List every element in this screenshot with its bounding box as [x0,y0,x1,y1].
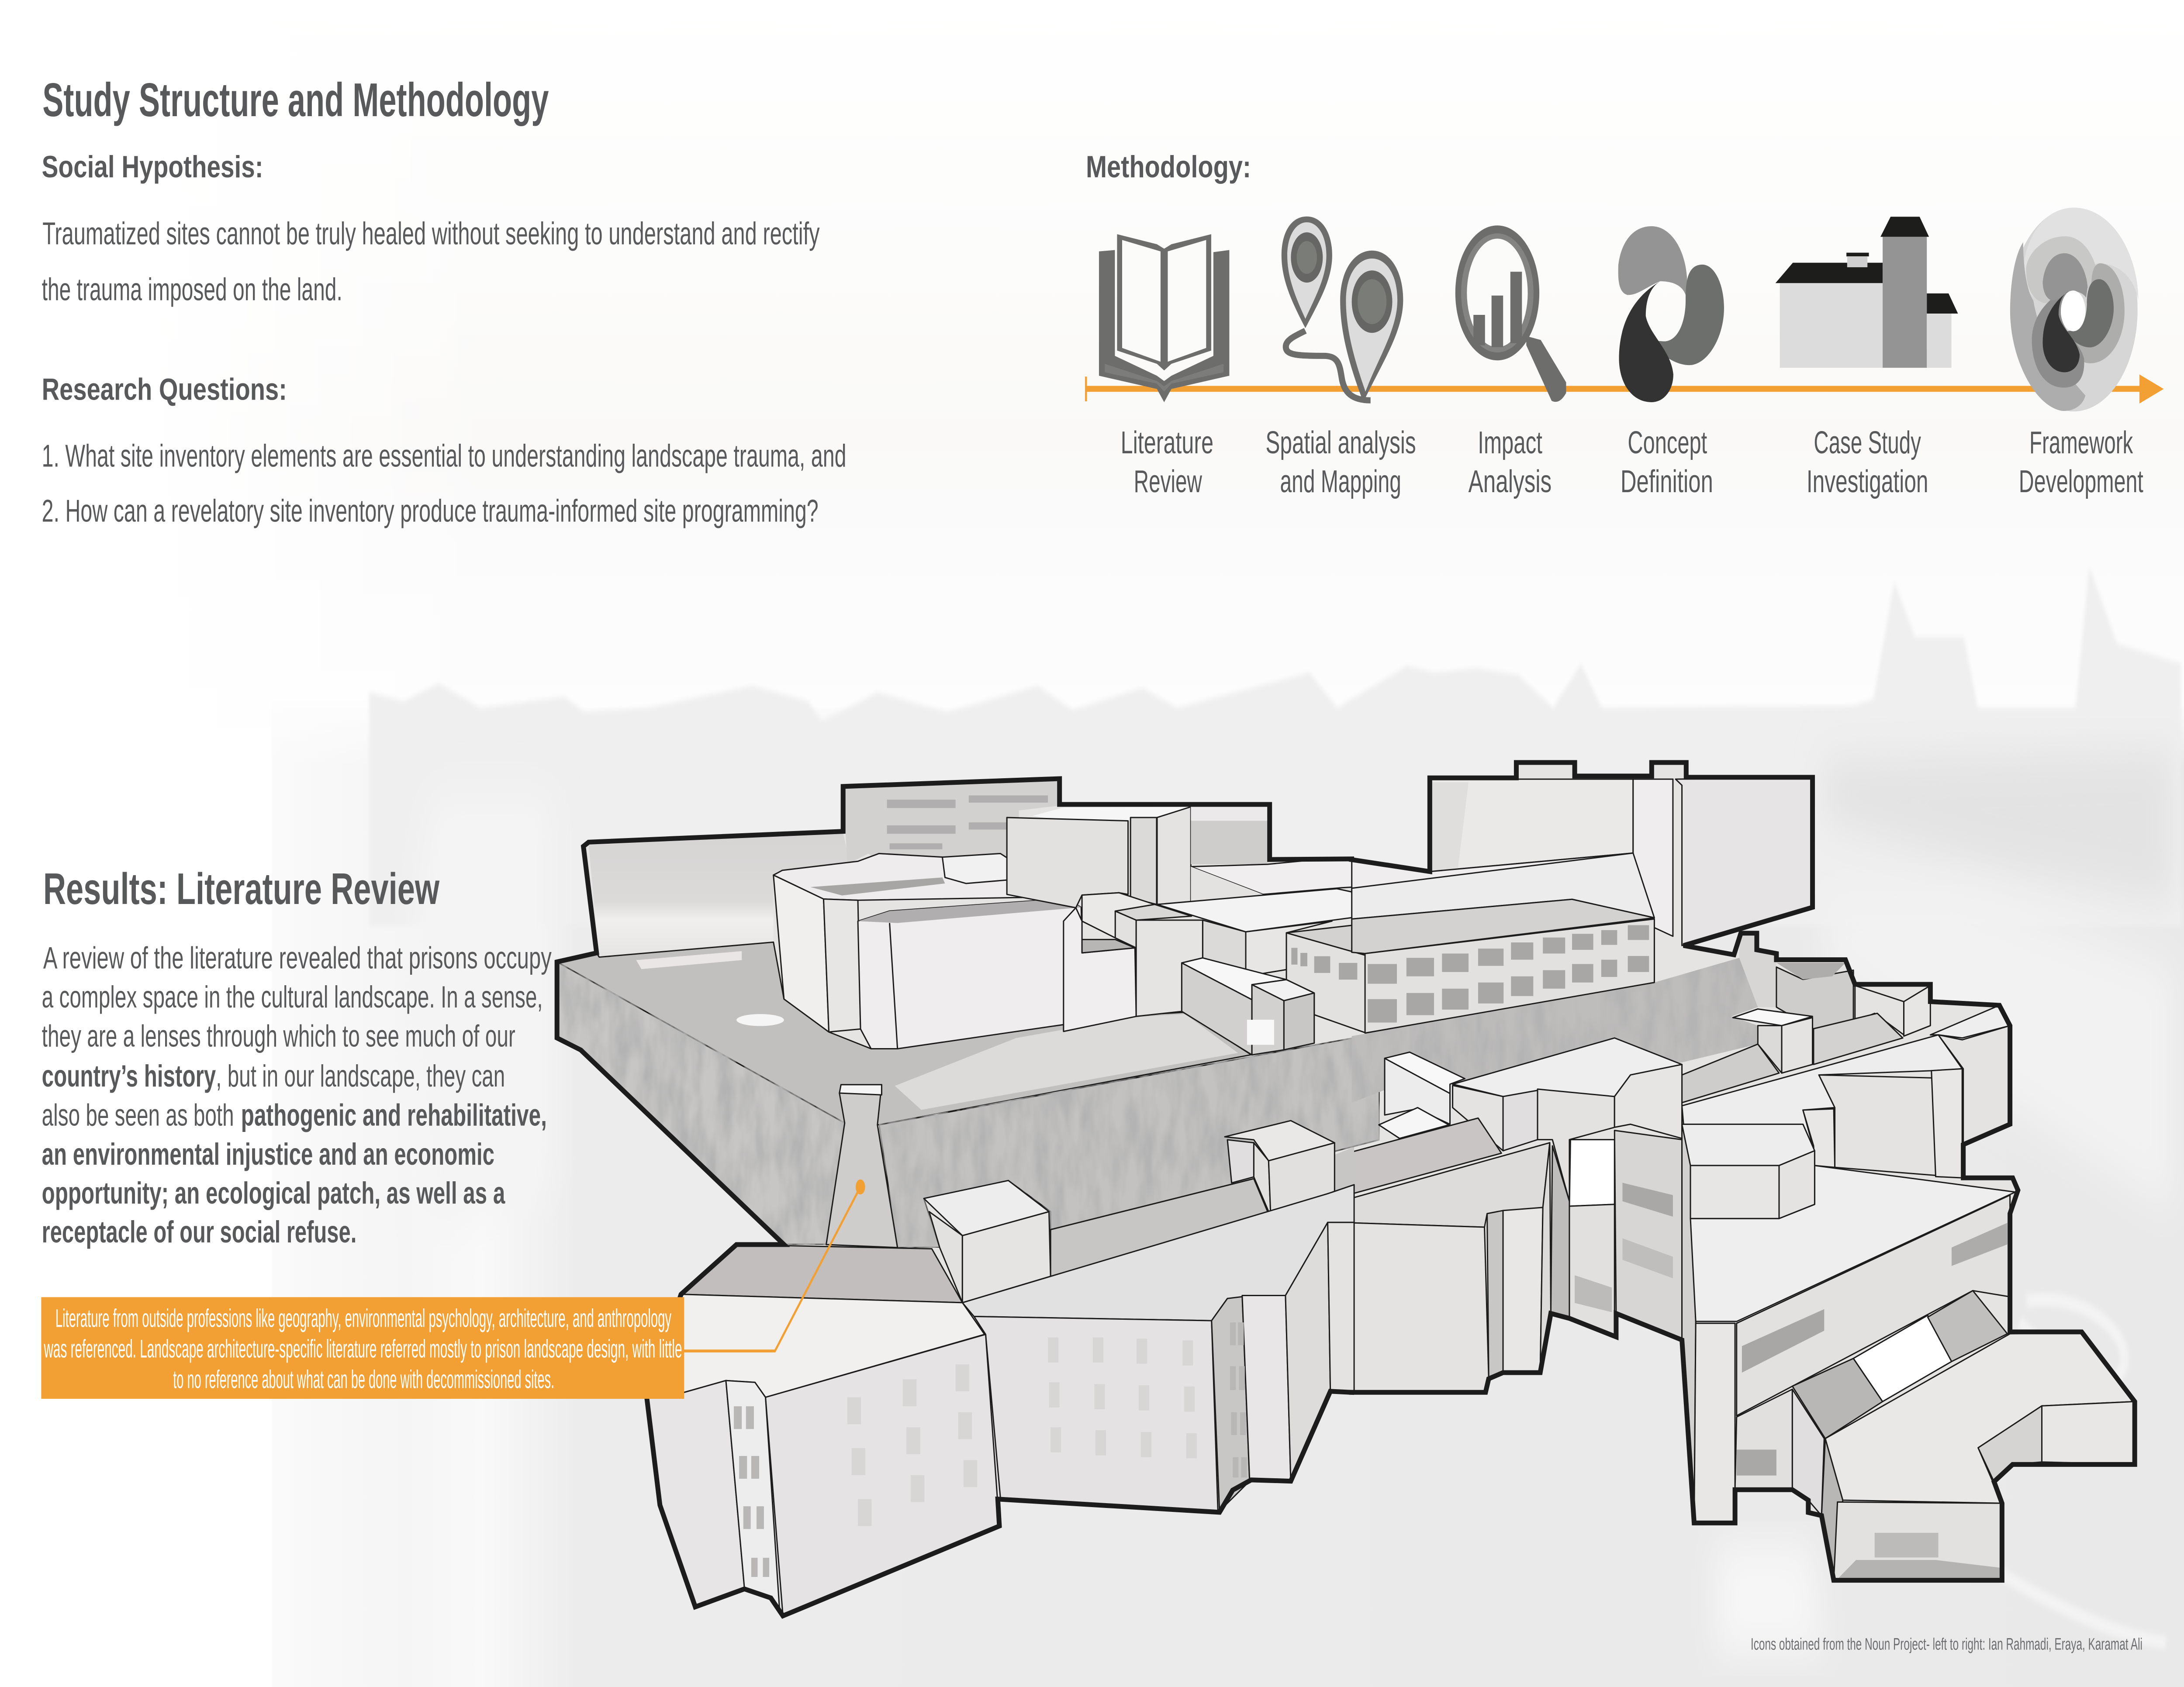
text block: literature review results: pathogenic and rehabilitative, [241,1097,547,1132]
heading: results: Results: Literature Review [43,864,439,914]
callout: literature note: to no reference about what can be done with decommissioned sites. [173,1366,554,1394]
labels: methodology steps: Analysis [1469,463,1552,499]
text block: research questions: 1. What site inventory elements are essential to understanding landscape trauma, and [42,438,846,473]
text block: research questions: 2. How can a revelatory site inventory produce trauma-informed site programming? [42,493,819,528]
icon: case study building [1776,217,1958,368]
back yard, walls and rear buildings [557,780,1379,1248]
labels: methodology steps: Literature [1121,424,1213,460]
callout: literature note: Literature from outside professions like geography, environmental psychology, architecture, and anthropology [55,1304,671,1333]
text block: literature review results: also be seen as both [42,1097,234,1132]
callout: literature note: was referenced. Landscape architecture-specific literature referred mostly to prison landscape design, with little [44,1335,682,1363]
text block: social hypothesis: the trauma imposed on the land. [42,272,342,307]
labels: methodology steps: Development [2019,463,2143,499]
labels: methodology steps: Review [1134,463,1202,499]
callout: literature note [41,1297,684,1399]
thick building outline [557,762,2135,1616]
heading: methodology: Methodology: [1086,149,1251,184]
center courtyard blocks [1385,1058,1450,1124]
text block: social hypothesis: Traumatized sites cannot be truly healed without seeking to understand and rectify [42,216,820,251]
labels: methodology steps: Spatial analysis [1265,424,1416,460]
title: Study Structure and Methodology [42,74,549,127]
text block: social hypothesis: Social Hypothesis: [42,149,263,184]
arrow: methodology timeline [1085,374,2163,404]
icon: magnifier with bars [1455,225,1566,402]
text block: literature review results: opportunity; an ecological patch, as well as a [42,1176,505,1211]
footnote: icon credits: Icons obtained from the Noun Project- left to right: Ian Rahmadi, Eraya, Karamat Ali [1751,1635,2143,1653]
text block: literature review results: an environmental injustice and an economic [42,1136,494,1171]
text block: social hypothesis [42,149,820,307]
text block: literature review results: country’s history [42,1059,216,1094]
front right wing [1682,1124,1696,1523]
labels: methodology steps: Impact [1478,424,1542,460]
text block: research questions [42,372,846,528]
icon: framework swirl in circle [2010,208,2138,411]
text block: research questions: Research Questions: [42,372,287,407]
text block: literature review results: a complex space in the cultural landscape. In a sense, [42,979,543,1014]
text block: literature review results [42,940,552,1249]
text block: literature review results: receptacle of our social refuse. [42,1214,356,1249]
center rear buildings [1007,807,1462,1055]
front left buildings [647,1121,1354,1616]
text block: literature review results: they are a lenses through which to see much of our [42,1018,515,1053]
arrow: callout leader line [684,1180,865,1351]
silhouette fill [557,762,2135,1616]
labels: methodology steps: Case Study [1814,424,1921,460]
icon: concept swirl [1618,226,1724,402]
labels: methodology steps: Framework [2029,424,2133,460]
icon: map pins with route [1282,217,1403,402]
labels: methodology steps: Investigation [1807,463,1928,499]
text block: literature review results: A review of the literature revealed that prisons occupy [43,940,552,975]
text block: literature review results: , but in our landscape, they can [216,1059,505,1094]
right wing buildings [1352,777,2135,1580]
illustration: prison complex model [557,762,2135,1616]
labels: methodology steps: and Mapping [1280,463,1401,499]
icon: open book [1099,234,1229,402]
labels: methodology steps: Definition [1621,463,1713,499]
labels: methodology steps [1121,424,2143,499]
labels: methodology steps: Concept [1628,424,1707,460]
